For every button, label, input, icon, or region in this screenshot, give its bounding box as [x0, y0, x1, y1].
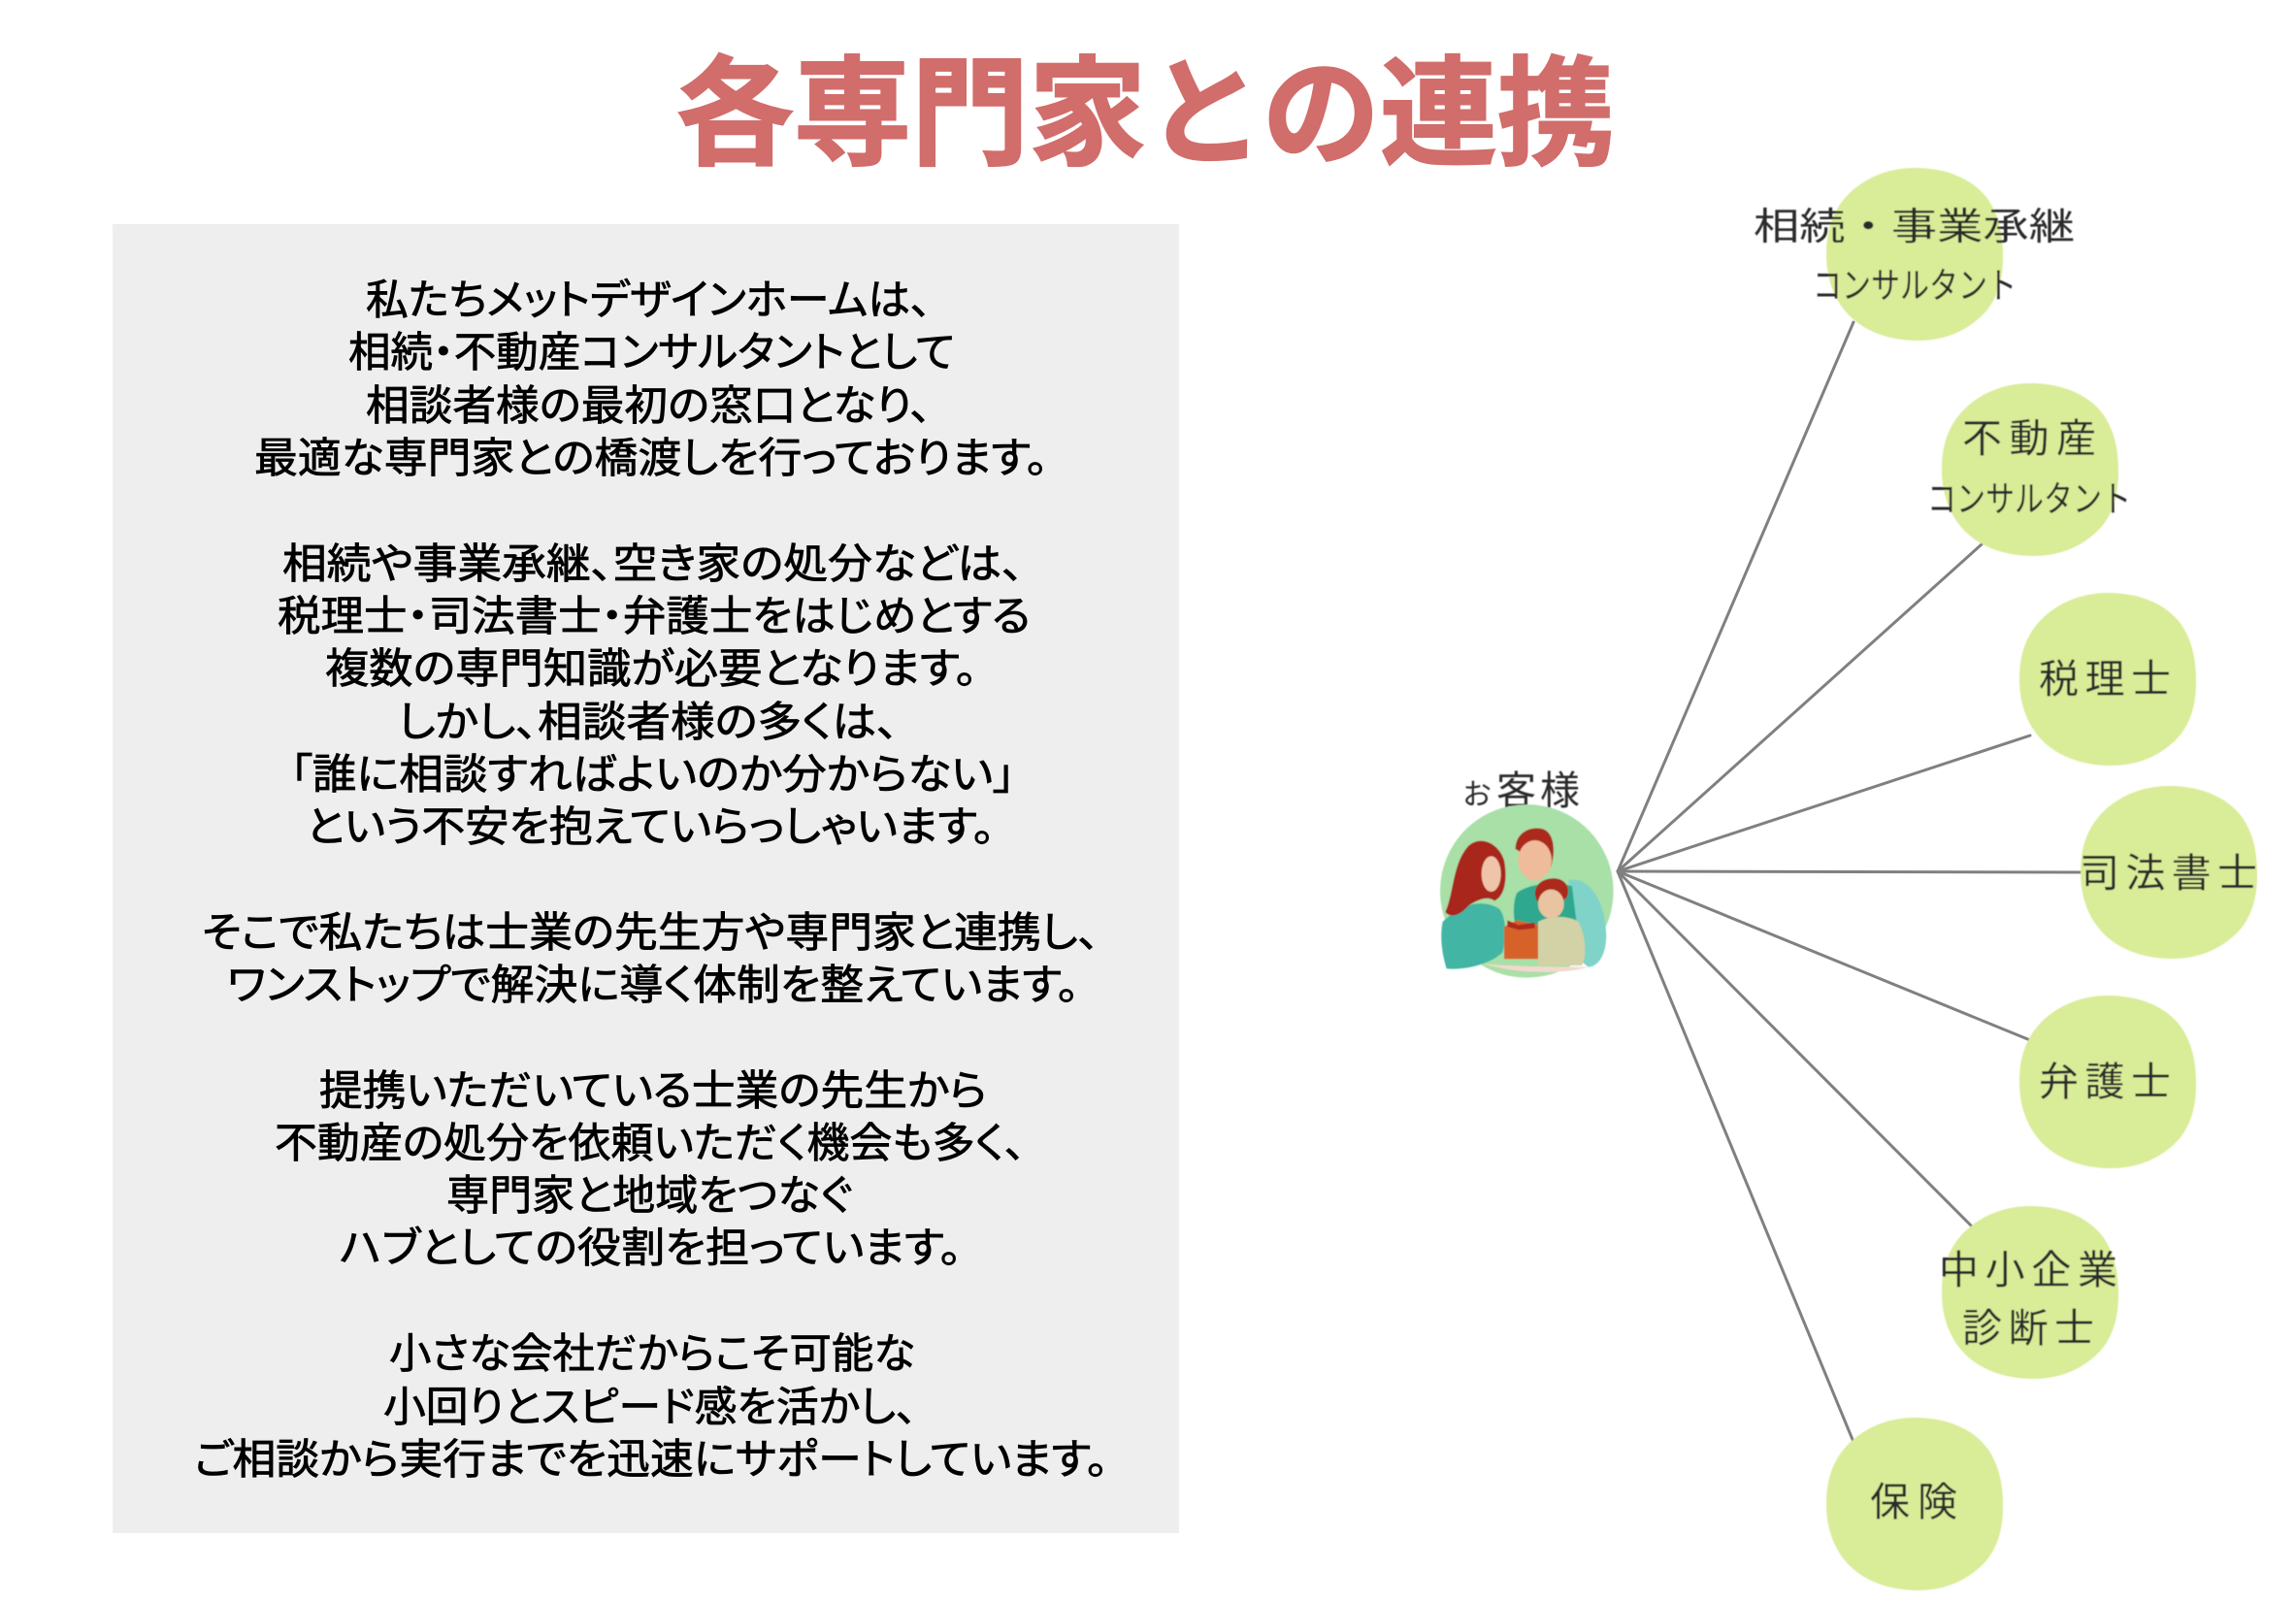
- text block: challenges: [278, 541, 1031, 851]
- text block: one-stop support: [202, 910, 1099, 1009]
- node: inheritance and business succession consultant: コンサルタント: [1813, 266, 2017, 306]
- text block: introduction: 私たちメットデザインホームは、: [366, 278, 932, 324]
- panel: description: [113, 224, 1179, 1533]
- node: lawyer: 弁護士: [2039, 1060, 2171, 1104]
- text block: hub role: ハブとしての役割を担っています。: [340, 1225, 962, 1272]
- node: real estate consultant: コンサルタント: [1927, 479, 2131, 519]
- node: tax accountant: 税理士: [2039, 657, 2171, 702]
- label: customer: 客様: [1496, 768, 1580, 813]
- text block: introduction: 最適な専門家との橋渡しを行っております。: [254, 436, 1048, 482]
- node: lawyer: [2019, 996, 2196, 1168]
- node: real estate consultant: [1927, 383, 2131, 556]
- node: SME consultant: [1939, 1206, 2118, 1379]
- text block: introduction: [254, 278, 1048, 482]
- text block: challenges: という不安を抱えていらっしゃいます。: [306, 804, 995, 851]
- text block: introduction: 相談者様の最初の窓口となり、: [366, 383, 932, 430]
- text block: challenges: 「誰に相談すればよいのか分からない」: [290, 752, 1015, 799]
- connector lines from customer to specialists: [1618, 322, 2082, 1442]
- text block: one-stop support: ワンストップで解決に導く体制を整えています。: [227, 963, 1079, 1009]
- text block: challenges: 相続や事業承継、空き家の処分などは、: [282, 541, 1024, 588]
- icon: family illustration: [1440, 804, 1614, 978]
- text block: speed: ご相談から実行までを迅速にサポートしています。: [194, 1437, 1108, 1484]
- node: inheritance and business succession consultant: 相続・事業承継: [1754, 207, 2075, 248]
- node: judicial scrivener: [2080, 786, 2257, 959]
- title: 各専門家との連携: [676, 49, 1615, 180]
- node: SME consultant: 中小企業: [1939, 1248, 2117, 1292]
- text block: speed: 小回りとスピード感を活かし、: [383, 1385, 917, 1431]
- node: insurance: [1826, 1418, 2003, 1590]
- node: insurance: 保険: [1870, 1480, 1957, 1524]
- node: SME consultant: 診断士: [1962, 1306, 2094, 1351]
- text block: hub role: 提携いただいている士業の先生から: [319, 1068, 987, 1115]
- text block: challenges: しかし、相談者様の多くは、: [398, 700, 899, 746]
- text block: speed: [194, 1331, 1108, 1484]
- node: real estate consultant: 不動産: [1962, 416, 2096, 461]
- text block: one-stop support: そこで私たちは士業の先生方や専門家と連携し、: [202, 910, 1099, 957]
- text block: challenges: 複数の専門知識が必要となります。: [325, 646, 977, 693]
- text block: hub role: [275, 1068, 1026, 1272]
- text block: hub role: 専門家と地域をつなぐ: [446, 1173, 852, 1220]
- text block: challenges: 税理士・司法書士・弁護士をはじめとする: [278, 594, 1031, 640]
- node: judicial scrivener: 司法書士: [2080, 851, 2257, 896]
- node: tax accountant: [2019, 593, 2196, 766]
- text block: hub role: 不動産の処分を依頼いただく機会も多く、: [275, 1121, 1026, 1167]
- node: inheritance and business succession consultant: [1754, 168, 2075, 341]
- label: customer: お: [1462, 779, 1492, 811]
- text block: introduction: 相続・不動産コンサルタントとして: [348, 330, 955, 376]
- text block: speed: 小さな会社だからこそ可能な: [389, 1331, 915, 1378]
